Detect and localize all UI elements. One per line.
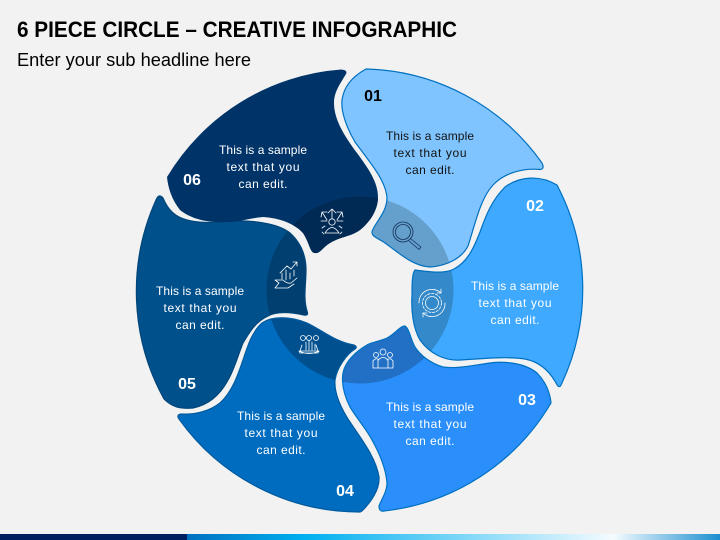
panel: piece 04 [177, 317, 380, 513]
text block 01: This is a sample [386, 129, 474, 143]
panel: piece 05 [136, 195, 308, 409]
text block 02: text that you [478, 296, 552, 310]
text block 04: This is a sample [237, 409, 325, 423]
icon: person with radiating arrows [321, 209, 343, 234]
text block 03 [386, 400, 474, 448]
icon: hand with growth chart [275, 262, 297, 288]
panel: piece 01 [341, 68, 544, 268]
number 05: 05 [178, 376, 196, 393]
panel: piece 06 [167, 70, 378, 254]
number 06: 06 [183, 172, 201, 189]
text block 05: can edit. [176, 318, 224, 332]
text block 02: can edit. [490, 313, 540, 327]
text block 04: text that you [244, 426, 318, 440]
icon: gear cycle [419, 289, 445, 317]
number 03: 03 [518, 392, 536, 409]
subtitle: Enter your sub headline here [17, 50, 251, 70]
text block 04 [237, 409, 325, 457]
text block 01: text that you [394, 146, 466, 160]
icon: team of people [373, 349, 393, 368]
text block 02: This is a sample [471, 279, 559, 293]
text block 03: can edit. [406, 434, 454, 448]
text block 01 [386, 129, 474, 177]
number 04: 04 [336, 483, 354, 500]
text block 05: text that you [164, 301, 236, 315]
text block 03: This is a sample [386, 400, 474, 414]
text block 01: can edit. [406, 163, 454, 177]
text block 03: text that you [394, 417, 466, 431]
panel: piece 03 [342, 325, 552, 512]
text block 06: text that you [226, 160, 300, 174]
text block 06 [219, 143, 307, 191]
number 02: 02 [526, 198, 544, 215]
text block 05: This is a sample [156, 284, 244, 298]
icon: people and bars [299, 336, 319, 354]
text block 04: can edit. [256, 443, 306, 457]
text block 06: can edit. [238, 177, 288, 191]
text block 05 [156, 284, 244, 332]
panel: piece 02 [411, 178, 584, 388]
icon: magnifier [393, 222, 421, 250]
title: 6 PIECE CIRCLE – CREATIVE INFOGRAPHIC [17, 17, 457, 42]
text block 02 [471, 279, 559, 327]
number 01: 01 [364, 88, 382, 105]
footer bar [0, 534, 720, 540]
text block 06: This is a sample [219, 143, 307, 157]
